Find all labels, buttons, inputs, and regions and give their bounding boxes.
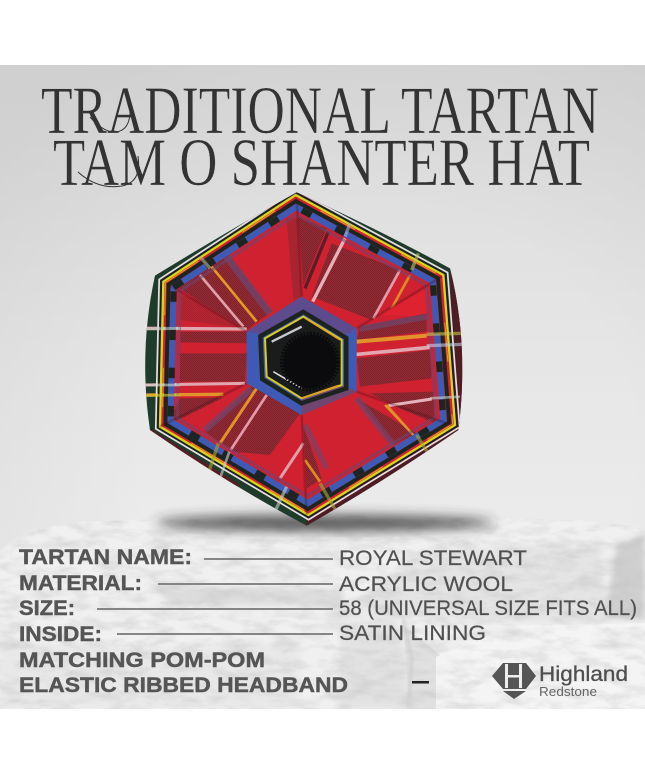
spec: size: 58 (UNIVERSAL SIZE FITS ALL) bbox=[339, 597, 637, 620]
spec: size bbox=[19, 597, 637, 620]
outer tartan bands bbox=[156, 190, 460, 520]
panel: bottom left bbox=[205, 385, 303, 478]
fabric fold shadows bbox=[160, 198, 452, 515]
spec: inside: INSIDE: bbox=[19, 623, 102, 646]
panel: top left bbox=[173, 218, 302, 330]
logo sub-wordmark: Redstone bbox=[539, 684, 597, 699]
pom-pom bbox=[282, 333, 338, 390]
title bbox=[41, 72, 599, 200]
panel: right bbox=[356, 290, 435, 430]
spec: tartan name: TARTAN NAME: bbox=[19, 546, 192, 569]
seam cross-checks bbox=[143, 223, 463, 515]
feature: headband: ELASTIC RIBBED HEADBAND bbox=[19, 674, 348, 697]
feature: pom-pom: MATCHING POM-POM bbox=[19, 649, 265, 672]
spec: material: ACRYLIC WOOL bbox=[339, 573, 513, 596]
panel: bottom right bbox=[303, 398, 417, 488]
panel: left bbox=[145, 295, 247, 422]
spec: size: SIZE: bbox=[19, 597, 75, 620]
logo wordmark: Highland bbox=[539, 663, 628, 686]
red fabric base bbox=[160, 195, 455, 515]
tartan hat bbox=[145, 192, 462, 526]
rock podium bbox=[0, 510, 645, 710]
spec: tartan name: ROYAL STEWART bbox=[339, 547, 527, 570]
spec list bbox=[19, 546, 637, 697]
spec: material bbox=[19, 572, 513, 596]
logo bbox=[492, 663, 628, 699]
panel: top right bbox=[298, 217, 410, 320]
spec: inside bbox=[19, 622, 486, 646]
crown bands bbox=[247, 297, 357, 415]
spec: material: MATERIAL: bbox=[19, 572, 142, 595]
spec: inside: SATIN LINING bbox=[339, 622, 486, 645]
title swashes bbox=[78, 104, 139, 187]
icon: diamond mark bbox=[492, 663, 536, 699]
outer edge fabric bbox=[145, 192, 462, 526]
hat shadow bbox=[155, 515, 495, 531]
spec: tartan name bbox=[19, 546, 527, 570]
